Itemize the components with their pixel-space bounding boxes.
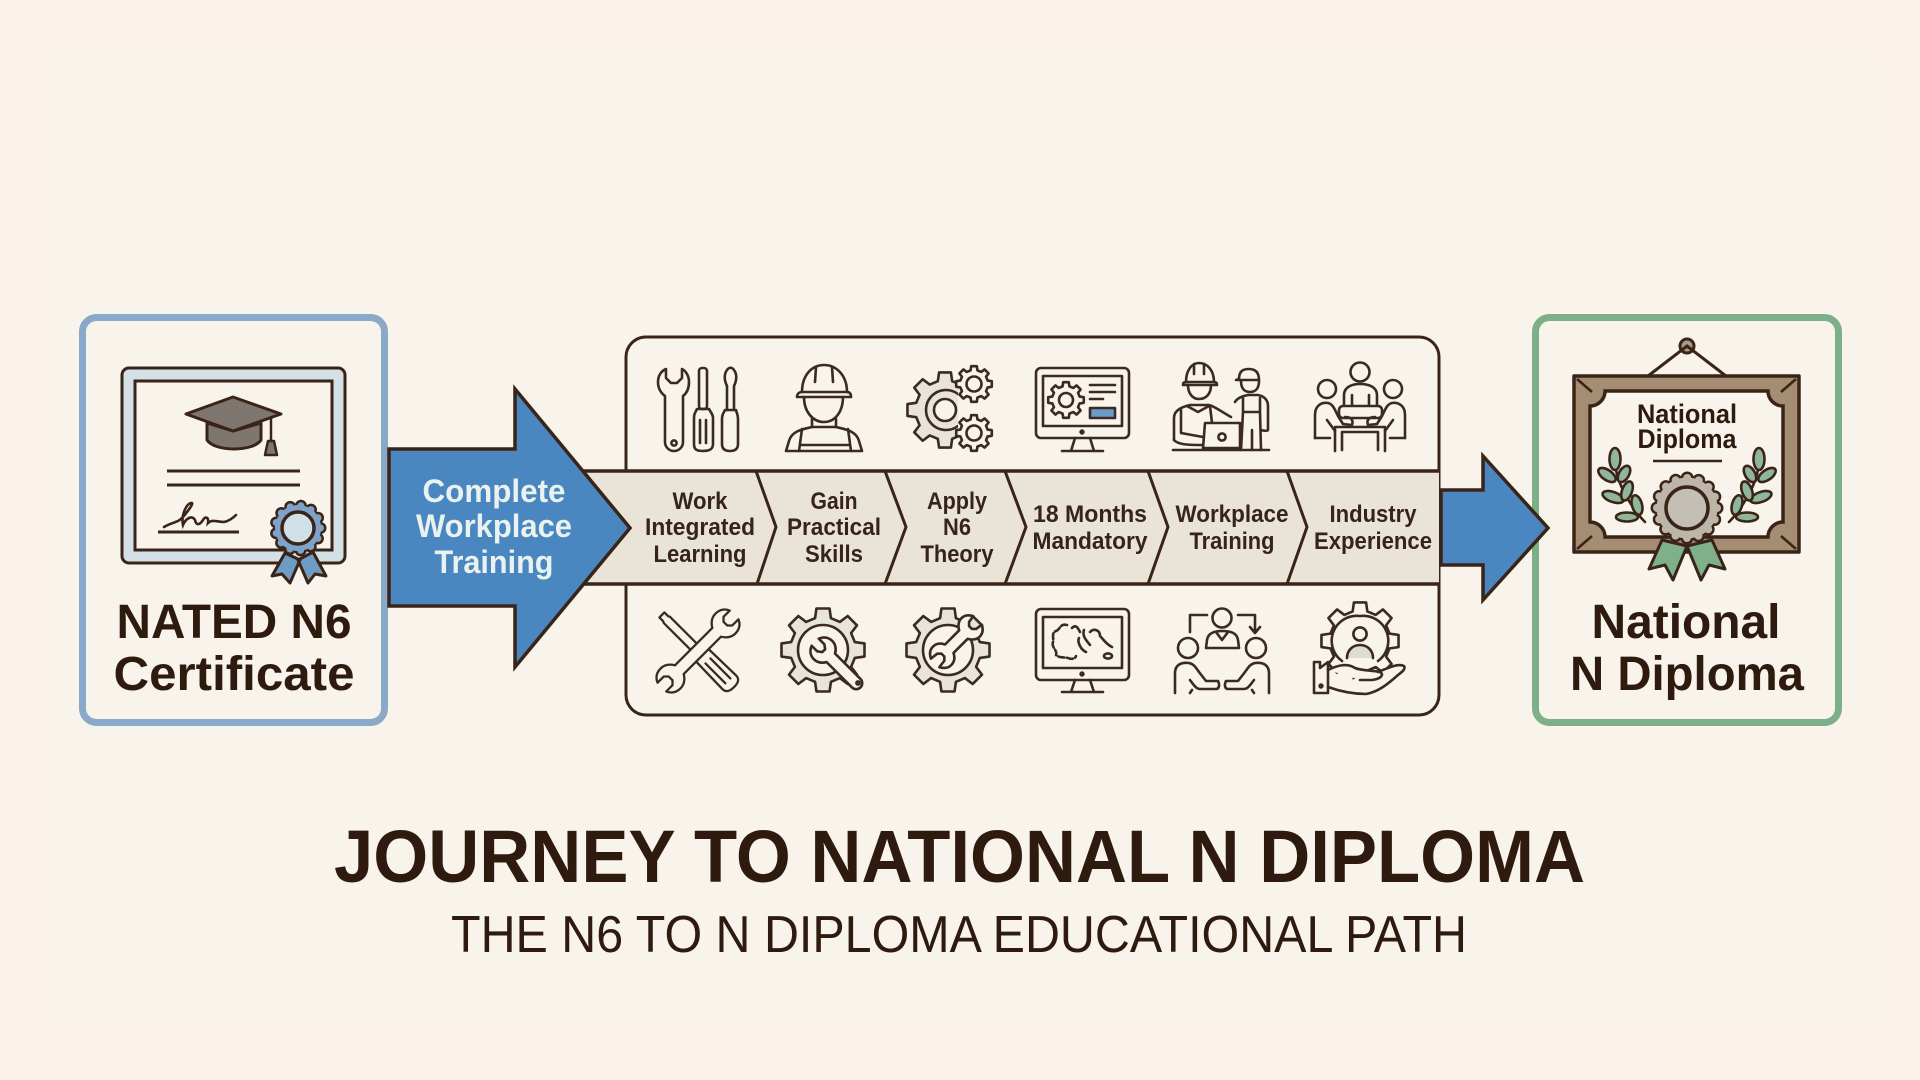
step text: Industry Experience	[1314, 501, 1432, 555]
step text: Work Integrated Learning: Integrated	[645, 514, 755, 541]
panel: National N Diploma	[1536, 318, 1838, 722]
step text: Workplace Training: Training	[1190, 528, 1274, 555]
icon: computer with broken gear sketch	[1036, 609, 1129, 692]
step text: Industry Experience: Industry	[1330, 501, 1417, 528]
arrow label	[416, 473, 572, 580]
icon: gear with diagonal wrench	[907, 609, 989, 691]
step text: Work Integrated Learning	[645, 488, 755, 568]
subtitle: THE N6 TO N DIPLOMA EDUCATIONAL PATH	[451, 906, 1467, 964]
step text: Apply N6 Theory: Apply	[927, 488, 988, 515]
step text: Industry Experience: Experience	[1314, 528, 1432, 555]
step text: Gain Practical Skills: Practical	[787, 514, 881, 541]
icon: worker with hard hat	[786, 365, 862, 451]
step text: Work Integrated Learning: Work	[672, 488, 728, 515]
icon: team meeting at a table	[1315, 362, 1405, 451]
arrow label: Training	[434, 544, 554, 580]
step text: 18 Months Mandatory	[1032, 501, 1148, 555]
diploma text: National	[1637, 399, 1737, 429]
step text: Gain Practical Skills	[787, 488, 881, 568]
step text: 18 Months Mandatory: Mandatory	[1032, 528, 1148, 555]
icon: certificate with graduation cap	[122, 368, 345, 583]
heading: National N Diploma	[1570, 596, 1804, 701]
panel: NATED N6 certificate	[82, 318, 384, 722]
step text: Workplace Training: Workplace	[1176, 501, 1288, 528]
icon: hand holding gear with person	[1314, 602, 1405, 694]
title: JOURNEY TO NATIONAL N DIPLOMA	[334, 815, 1585, 898]
icon: gear with wrench	[782, 609, 870, 697]
icon: computer with gear and settings	[1036, 368, 1129, 451]
heading: NATED N6 Certificate: NATED N6	[116, 596, 352, 649]
step text: Gain Practical Skills: Skills	[805, 541, 863, 568]
icon: mentor and two workers exchange	[1175, 608, 1269, 693]
step text: Gain Practical Skills: Gain	[810, 488, 858, 515]
step text: Apply N6 Theory: N6	[943, 514, 971, 541]
icon: two workers at a laptop	[1173, 363, 1269, 450]
heading: National N Diploma: N Diploma	[1570, 648, 1804, 701]
icon: left laurel	[1596, 448, 1645, 522]
panel: workplace training steps	[520, 337, 1439, 715]
arrow label: Complete	[422, 473, 566, 509]
arrow: Complete Workplace Training	[389, 389, 630, 667]
arrow label: Workplace	[416, 508, 572, 544]
icon: wrench and screwdrivers	[658, 368, 738, 451]
heading: NATED N6 Certificate	[114, 596, 354, 701]
diploma text: Diploma	[1638, 424, 1737, 454]
step text: Apply N6 Theory: Theory	[920, 541, 994, 568]
step text: Work Integrated Learning: Learning	[654, 541, 746, 568]
diploma text	[1637, 399, 1737, 461]
icon: crossed wrench and screwdriver	[652, 605, 744, 697]
arrow: to diploma	[1441, 456, 1548, 600]
icon: gears	[907, 366, 992, 451]
heading: National N Diploma: National	[1592, 596, 1780, 649]
step text: 18 Months Mandatory: 18 Months	[1033, 501, 1147, 528]
icon: framed diploma	[1574, 339, 1799, 580]
step text: Apply N6 Theory	[920, 488, 994, 568]
heading: NATED N6 Certificate: Certificate	[114, 648, 354, 701]
band: chevron steps	[520, 471, 1439, 584]
icon: right laurel	[1729, 448, 1778, 522]
step text: Workplace Training	[1176, 501, 1288, 555]
icon: diploma seal with green ribbons	[1649, 478, 1725, 580]
